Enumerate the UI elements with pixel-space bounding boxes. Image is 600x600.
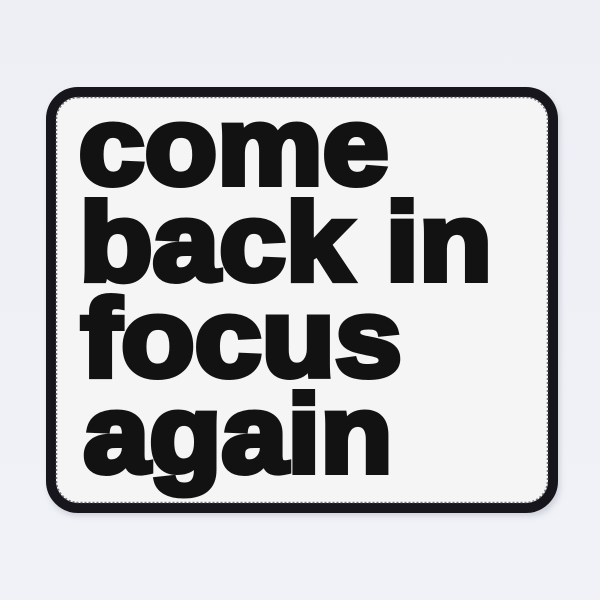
line: focus: focus xyxy=(81,277,402,400)
mat with stitched border xyxy=(51,92,553,508)
slogan text xyxy=(79,85,492,496)
line: come: come xyxy=(79,85,389,208)
line: again: again xyxy=(84,373,392,496)
line: back in: back in xyxy=(80,181,492,304)
